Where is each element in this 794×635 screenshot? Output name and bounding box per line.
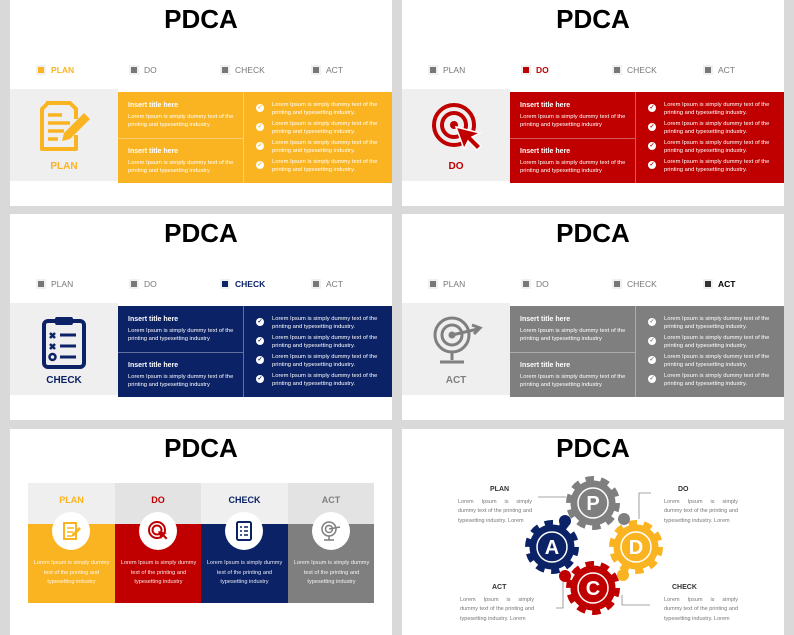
content panel: Lorem Ipsum is simply dummy text of the printing and typesetting industry. <box>272 159 377 172</box>
gear letters: P <box>586 493 600 515</box>
icon panel: check <box>10 303 118 395</box>
gear D <box>613 524 659 570</box>
content panel: Lorem Ipsum is simply dummy text of the printing and typesetting industry. <box>272 140 377 154</box>
content panel: Lorem Ipsum is simply dummy text of the printing and typesetting industry. <box>272 121 377 134</box>
tabs: ACT <box>718 65 735 75</box>
small connector circles <box>559 513 630 582</box>
content panel: Lorem Ipsum is simply dummy text of the printing and typesetting industry <box>128 374 233 388</box>
content panel: Lorem Ipsum is simply dummy text of the printing and typesetting industry. <box>664 373 769 386</box>
content panel: Lorem Ipsum is simply dummy text of the printing and typesetting industry. <box>272 316 377 330</box>
content panel: Lorem Ipsum is simply dummy text of the printing and typesetting industry <box>520 114 625 128</box>
icon: clipboard checklist <box>42 317 86 369</box>
tabs: ACT <box>718 279 735 289</box>
tabs: PLAN <box>51 65 74 75</box>
content panel: Lorem Ipsum is simply dummy text of the printing and typesetting industry <box>520 328 625 342</box>
tabs: DO <box>144 279 157 289</box>
icon: target with cursor <box>432 103 482 150</box>
content panel: Lorem Ipsum is simply dummy text of the printing and typesetting industry <box>520 374 625 388</box>
icon panel: do <box>402 89 510 181</box>
slide 3: CHECK <box>10 214 392 420</box>
content panel: Lorem Ipsum is simply dummy text of the printing and typesetting industry. <box>664 354 769 368</box>
label: check <box>664 584 738 622</box>
content panel: Insert title here <box>128 362 178 369</box>
gear letters: A <box>545 537 559 559</box>
content panel: Insert title here <box>520 102 570 109</box>
icon panel: do: DO <box>448 161 464 172</box>
tabs: DO <box>536 279 549 289</box>
title: PDCA <box>556 218 630 248</box>
content panel: Lorem Ipsum is simply dummy text of the printing and typesetting industry. <box>664 335 769 348</box>
icon panel: plan <box>10 89 118 181</box>
gear letters <box>545 493 643 600</box>
label: check: Lorem Ipsum is simply dummy text of the printing and typesetting industry. Lorem <box>664 597 738 622</box>
label: do: DO <box>678 486 688 493</box>
tabs: CHECK <box>627 65 657 75</box>
tabs: CHECK <box>235 279 265 289</box>
slide 1: PLAN <box>10 0 392 206</box>
icon panel: check: CHECK <box>46 375 82 386</box>
content panel: Lorem Ipsum is simply dummy text of the printing and typesetting industry. <box>664 159 769 172</box>
column: check: Lorem Ipsum is simply dummy text of the printing and typesetting industry <box>207 560 282 585</box>
content panel: Lorem Ipsum is simply dummy text of the printing and typesetting industry. <box>664 121 769 134</box>
label: check: CHECK <box>672 584 697 591</box>
column: do: DO <box>151 495 165 505</box>
content panel: Lorem Ipsum is simply dummy text of the printing and typesetting industry. <box>272 102 377 116</box>
title: PDCA <box>164 4 238 34</box>
tabs <box>428 65 735 75</box>
title: PDCA <box>556 4 630 34</box>
icon: document <box>52 512 90 550</box>
label: plan: PLAN <box>490 486 509 493</box>
tabs: PLAN <box>443 279 465 289</box>
label: do <box>664 486 738 524</box>
label: act: ACT <box>492 584 506 591</box>
content panel: Lorem Ipsum is simply dummy text of the printing and typesetting industry. <box>664 140 769 154</box>
content panel: Lorem Ipsum is simply dummy text of the printing and typesetting industry <box>128 328 233 342</box>
gear A <box>529 524 575 570</box>
slide 6: gears <box>402 429 784 635</box>
icon: clipboard <box>225 512 263 550</box>
content panel <box>118 306 392 397</box>
column: plan: PLAN <box>59 495 84 505</box>
label: plan: Lorem Ipsum is simply dummy text of the printing and typesetting industry. Lorem <box>458 499 532 524</box>
column: do: Lorem Ipsum is simply dummy text of the printing and typesetting industry <box>121 560 196 585</box>
tabs <box>36 279 343 289</box>
tabs: CHECK <box>627 279 657 289</box>
tabs: ACT <box>326 279 343 289</box>
gear diagram <box>525 476 663 615</box>
label: act <box>460 584 534 622</box>
icon panel: act: ACT <box>446 375 466 386</box>
content panel: Lorem Ipsum is simply dummy text of the printing and typesetting industry <box>128 160 233 174</box>
column: plan <box>28 483 115 603</box>
slide 2: DO <box>402 0 784 206</box>
content panel: Insert title here <box>128 102 178 109</box>
column: plan: Lorem Ipsum is simply dummy text of the printing and typesetting industry <box>34 560 109 585</box>
column: act: Lorem Ipsum is simply dummy text of the printing and typesetting industry <box>294 560 369 585</box>
slide 5: four columns <box>10 429 392 635</box>
content panel: Lorem Ipsum is simply dummy text of the printing and typesetting industry. <box>272 335 377 348</box>
label: do: Lorem Ipsum is simply dummy text of the printing and typesetting industry. Lorem <box>664 499 738 524</box>
column: do <box>115 483 201 603</box>
icon: target on stand <box>434 316 483 364</box>
tabs: PLAN <box>443 65 465 75</box>
content panel <box>118 92 392 183</box>
content panel: Lorem Ipsum is simply dummy text of the printing and typesetting industry. <box>664 102 769 116</box>
content panel: Insert title here <box>128 316 178 323</box>
content panel: Insert title here <box>520 362 570 369</box>
icon: target stand <box>312 512 350 550</box>
content panel: Lorem Ipsum is simply dummy text of the printing and typesetting industry. <box>272 373 377 386</box>
column: check: CHECK <box>228 495 260 505</box>
tabs <box>36 65 343 75</box>
content panel: Insert title here <box>520 148 570 155</box>
icon panel: plan: PLAN <box>50 161 78 172</box>
content panel: Insert title here <box>520 316 570 323</box>
content panel <box>510 92 784 183</box>
icon: document with pencil <box>40 101 90 151</box>
tabs: ACT <box>326 65 343 75</box>
column: act <box>288 483 374 603</box>
gear letters: C <box>586 578 600 600</box>
content panel: Insert title here <box>128 148 178 155</box>
label: act: Lorem Ipsum is simply dummy text of the printing and typesetting industry. Lorem <box>460 597 534 622</box>
content panel: Lorem Ipsum is simply dummy text of the printing and typesetting industry <box>128 114 233 128</box>
content panel: Lorem Ipsum is simply dummy text of the printing and typesetting industry. <box>664 316 769 330</box>
tabs: DO <box>536 65 549 75</box>
content panel: Lorem Ipsum is simply dummy text of the printing and typesetting industry <box>520 160 625 174</box>
gear C <box>570 565 616 611</box>
title: PDCA <box>556 433 630 463</box>
title: PDCA <box>164 218 238 248</box>
slide 4: ACT <box>402 214 784 420</box>
gear letters: D <box>629 537 643 559</box>
gear P <box>570 480 616 526</box>
content panel: Lorem Ipsum is simply dummy text of the printing and typesetting industry. <box>272 354 377 368</box>
column: check <box>201 483 288 603</box>
tabs <box>428 279 736 289</box>
label: plan <box>458 486 532 524</box>
tabs: CHECK <box>235 65 265 75</box>
content panel <box>510 306 784 397</box>
column: act: ACT <box>322 495 340 505</box>
title: PDCA <box>164 433 238 463</box>
arrows <box>538 493 651 608</box>
icon panel: act <box>402 303 510 395</box>
icon: target <box>139 512 177 550</box>
tabs: DO <box>144 65 157 75</box>
tabs: PLAN <box>51 279 73 289</box>
